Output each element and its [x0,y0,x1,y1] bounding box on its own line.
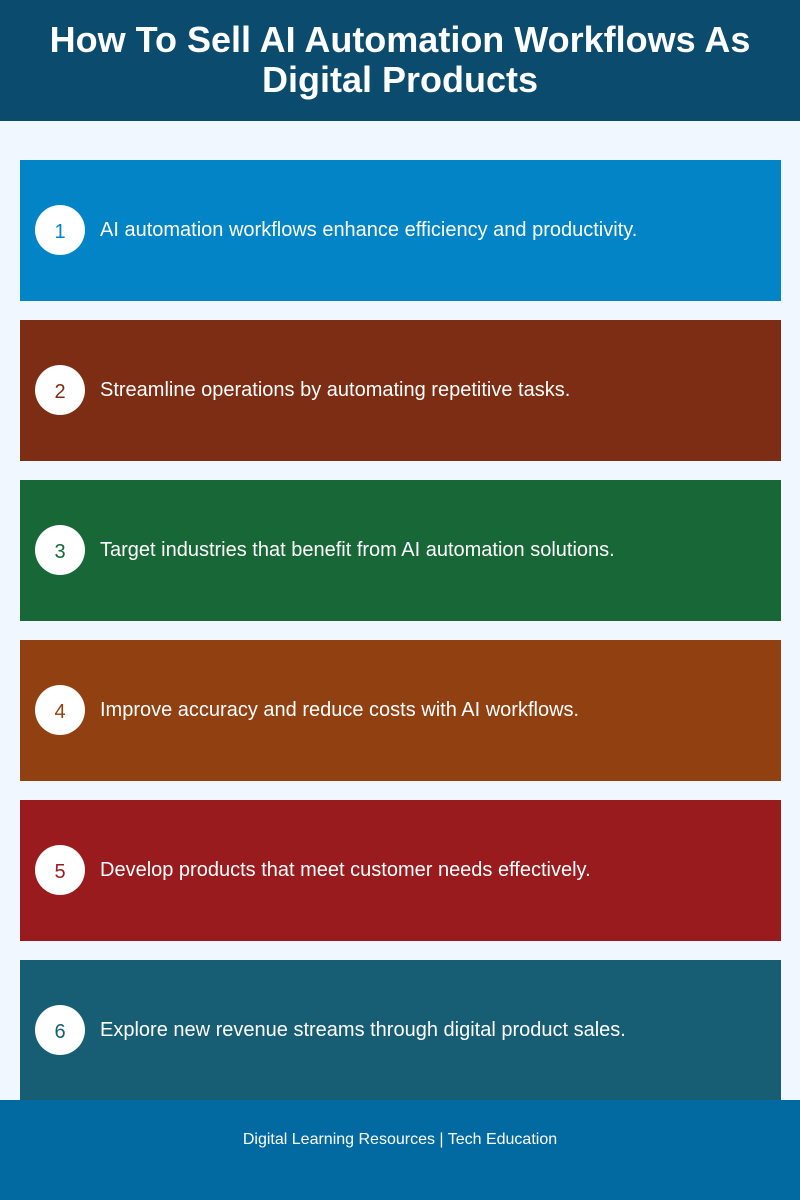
panel: step 6: Explore new revenue streams through digital product sales. [100,1019,626,1041]
footer [0,1100,800,1200]
panel: step 5: Develop products that meet customer needs effectively. [100,859,591,881]
panel: step 3 [20,480,781,621]
title: Digital Products [262,59,538,100]
panel: step 2: 2 [54,381,66,403]
panel: step 4: 4 [54,701,66,723]
title: How To Sell AI Automation Workflows As [50,19,750,60]
panel: step 4: Improve accuracy and reduce costs with AI workflows. [100,699,579,721]
panel: step 5 [20,800,781,941]
footer: Digital Learning Resources | Tech Education [243,1131,557,1148]
panel: step 1: 1 [54,221,66,243]
panel: step 5: 5 [54,861,66,883]
panel: step 1 [20,160,781,301]
panel: step 3: 3 [54,541,66,563]
panel: step 1: AI automation workflows enhance efficiency and productivity. [100,219,637,241]
panel: step 6: 6 [54,1021,66,1043]
panel: step 2 [20,320,781,461]
panel: step 2: Streamline operations by automating repetitive tasks. [100,379,570,401]
panel: step 6 [20,960,781,1101]
title [0,0,800,121]
panel: step 3: Target industries that benefit from AI automation solutions. [100,539,615,561]
panel: step 4 [20,640,781,781]
